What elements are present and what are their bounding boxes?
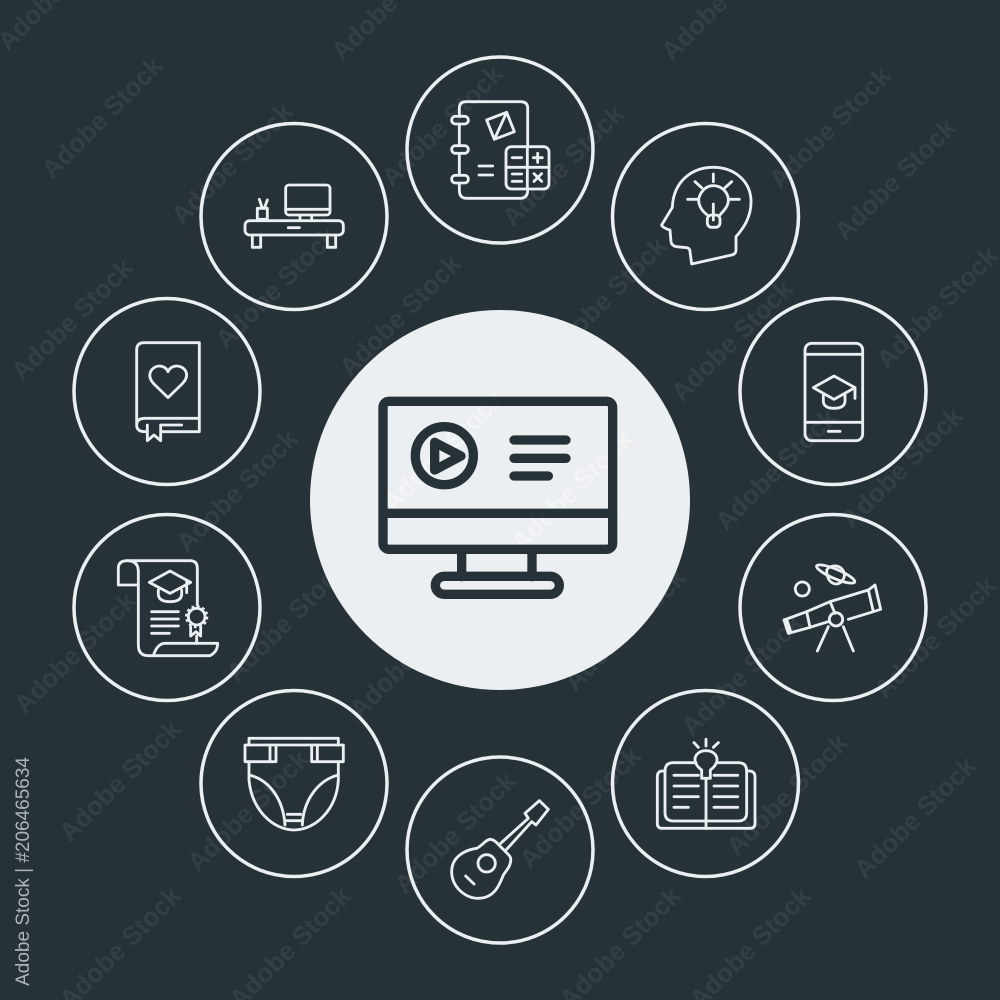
center circle with monitor: Adobe Stock: [376, 383, 510, 517]
watermark pattern: Adobe Stock: [53, 713, 187, 847]
watermark pattern: Adobe Stock: [8, 585, 142, 719]
watermark pattern: Adobe Stock: [375, 58, 509, 192]
watermark pattern: Adobe Stock: [35, 50, 169, 184]
panel: idea book: [612, 690, 798, 876]
icon: diaper: [245, 738, 343, 830]
watermark pattern: Adobe Stock: [513, 740, 647, 874]
panel: love book: [74, 298, 260, 484]
panel: calculator notebook: [407, 57, 593, 243]
panel: diploma: [74, 514, 260, 700]
panel: diaper: [201, 690, 387, 876]
panel: telescope: [740, 514, 926, 700]
watermark pattern: Adobe Stock: [5, 252, 139, 386]
icon: diploma scroll with seal: [118, 561, 218, 656]
icon: open book with bulb: [657, 739, 755, 828]
icon: acoustic guitar: [452, 801, 548, 898]
icon: telescope with planets: [784, 562, 881, 651]
panel: desk: [201, 124, 387, 310]
watermark pattern: Adobe Stock: [709, 402, 843, 536]
watermark pattern: Adobe Stock: [165, 96, 299, 230]
watermark pattern: Adobe Stock: [868, 570, 1000, 704]
center circle with monitor: Adobe Stock: [505, 423, 639, 557]
watermark pattern: Adobe Stock: [388, 765, 522, 899]
watermark pattern: Adobe Stock: [848, 750, 982, 884]
icon: phone with graduation cap: [805, 343, 863, 441]
watermark pattern: Adobe Stock: [870, 240, 1000, 374]
watermark pattern: Adobe Stock: [539, 230, 673, 364]
panel: idea head: [612, 124, 798, 310]
side stock id text: Adobe Stock | #206465634: [13, 757, 34, 986]
icon: book with heart: [137, 343, 199, 441]
watermark pattern: Adobe Stock: [675, 607, 809, 741]
watermark pattern: Adobe Stock: [333, 248, 467, 382]
watermark pattern: Adobe Stock: [209, 220, 343, 354]
watermark pattern: Adobe Stock: [763, 60, 897, 194]
icon: notebook and calculator: [452, 102, 549, 198]
watermark pattern: Adobe Stock: [170, 423, 304, 557]
watermark pattern: Adobe Stock: [558, 562, 692, 696]
icon: head with light bulb: [662, 167, 751, 264]
watermark pattern: Adobe Stock: [720, 727, 854, 861]
watermark pattern: Adobe Stock: [665, 273, 799, 407]
center circle with monitor: [310, 310, 690, 690]
watermark pattern: Adobe Stock: [403, 532, 537, 666]
watermark pattern: Adobe Stock: [835, 400, 969, 534]
icon: monitor with video: [383, 401, 613, 594]
icon: desk with computer: [245, 185, 343, 247]
watermark pattern: Adobe Stock: [343, 590, 477, 724]
watermark pattern: Adobe Stock: [828, 112, 962, 246]
panel: mobile learning: [740, 298, 926, 484]
watermark pattern: Adobe Stock: [496, 98, 630, 232]
watermark pattern: Adobe Stock: [220, 553, 354, 687]
watermark pattern: Adobe Stock: [181, 743, 315, 877]
panel: guitar: [407, 757, 593, 943]
